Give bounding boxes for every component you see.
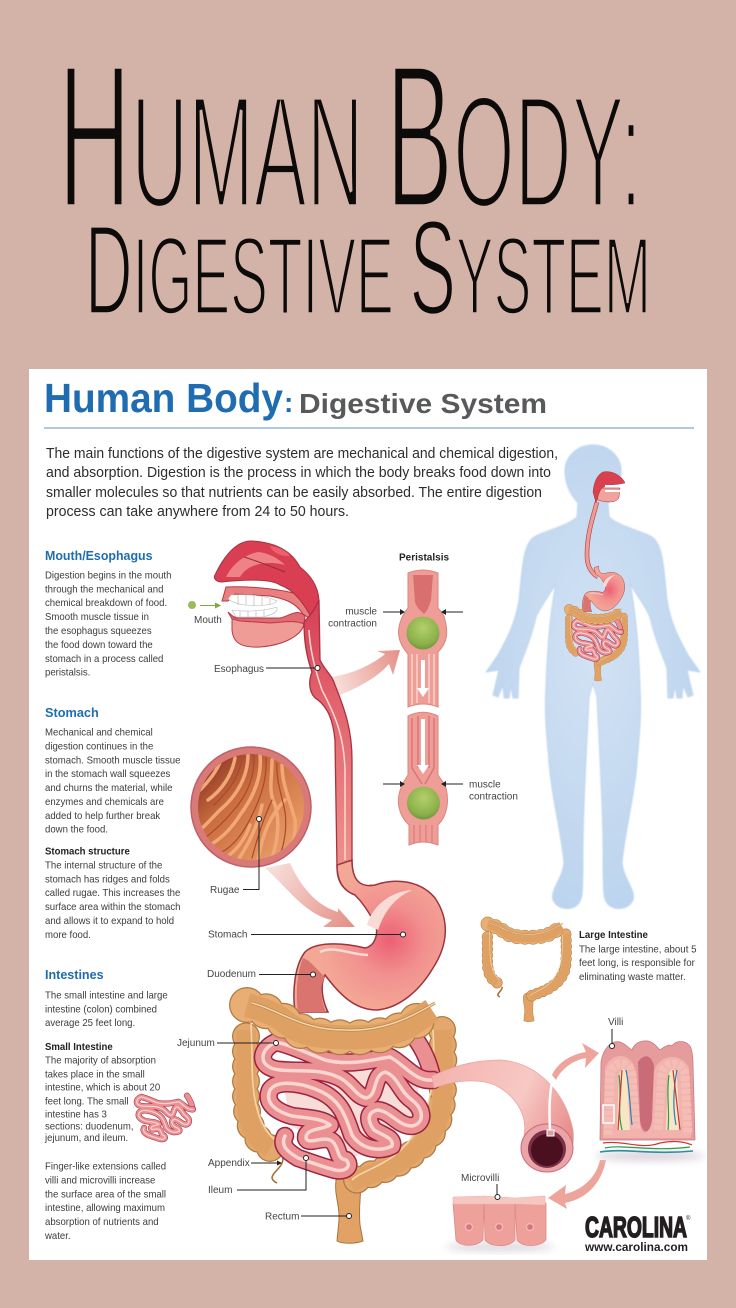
label: esophagus: Esophagus xyxy=(214,664,264,675)
text: intestines: intestine, allowing maximum xyxy=(45,1203,165,1214)
text: mouth/esophagus xyxy=(45,548,174,679)
text: intestines: intestine has 3 xyxy=(45,1109,107,1121)
logo: carolina: CAROLINA xyxy=(585,1212,687,1244)
label: villi xyxy=(608,1017,623,1048)
text: intestines: jejunum, and ileum. xyxy=(44,1133,128,1144)
tube from small intestine xyxy=(432,1060,573,1166)
rugae detail circle xyxy=(191,747,311,867)
label: mouth: Mouth xyxy=(194,615,222,626)
peristalsis: upper section xyxy=(399,570,447,707)
label: jejunum xyxy=(177,1038,278,1049)
text: intestines: The small intestine and large xyxy=(45,990,168,1002)
text: stomach: stomach has ridges and folds xyxy=(45,874,170,886)
text: mouth/esophagus: Mouth/Esophagus xyxy=(45,548,153,563)
label: peristalsis: Peristalsis xyxy=(399,552,449,564)
text: stomach: Mechanical and chemical xyxy=(45,727,153,739)
esophagus xyxy=(304,600,372,895)
intro text: smaller molecules so that nutrients can be easily absorbed. The entire digestion xyxy=(46,485,542,501)
text: stomach: stomach. Smooth muscle tissue xyxy=(45,755,181,767)
label: duodenum xyxy=(207,969,316,980)
labels and leader lines xyxy=(177,552,623,1222)
text: intestines: average 25 feet long. xyxy=(45,1018,135,1029)
text: stomach: Stomach structure xyxy=(45,846,130,858)
text: mouth/esophagus: Digestion begins in the mouth xyxy=(45,570,171,582)
intro text: process can take anywhere from 24 to 50 hours. xyxy=(46,504,349,520)
ascending and descending colon xyxy=(246,1015,443,1243)
label: esophagus xyxy=(214,664,320,675)
label: ileum: Ileum xyxy=(208,1185,232,1196)
text: mouth/esophagus: stomach in a process called xyxy=(45,654,163,665)
text: stomach: added to help further break xyxy=(45,811,160,822)
transverse colon xyxy=(247,1003,435,1037)
text: intestines: takes place in the small xyxy=(45,1069,145,1081)
arrow: villi to microvilli xyxy=(548,1160,606,1209)
intro text xyxy=(46,446,558,520)
large intestine icon xyxy=(487,923,566,1022)
icon: small intestine xyxy=(137,1096,193,1139)
text: stomach xyxy=(45,705,183,941)
label: rugae: Rugae xyxy=(210,885,240,896)
text: intestines: water. xyxy=(44,1231,71,1242)
label: stomach xyxy=(208,930,406,940)
text: mouth/esophagus: peristalsis. xyxy=(45,667,90,679)
text: intestines: intestine (colon) combined xyxy=(45,1004,157,1016)
peristalsis: lower section xyxy=(398,712,447,845)
text: stomach: surface area within the stomach xyxy=(45,902,180,913)
villi xyxy=(595,1041,705,1161)
label: ileum xyxy=(208,1156,308,1196)
body figure xyxy=(486,445,700,908)
text: stomach: down the food. xyxy=(45,824,108,836)
large intestine text: Large Intestine xyxy=(579,930,648,941)
text: stomach: and churns the material, while xyxy=(45,783,173,794)
intro text: and absorption. Digestion is the process in which the body breaks food down into xyxy=(46,465,551,481)
stomach and duodenum xyxy=(294,860,445,1012)
label: mouth xyxy=(188,601,222,626)
poster heading xyxy=(44,375,694,428)
text: intestines: feet long. The small xyxy=(45,1096,129,1108)
appendix xyxy=(272,1158,283,1183)
large intestine text: The large intestine, about 5 xyxy=(579,944,697,956)
text: stomach: digestion continues in the xyxy=(45,741,154,753)
text: mouth/esophagus: chemical breakdown of food. xyxy=(45,598,167,609)
poster heading: Human Body xyxy=(44,375,283,421)
label: muscle contraction lower: muscle xyxy=(469,780,501,790)
text: stomach: Stomach xyxy=(45,705,99,720)
arrow: tube to villi xyxy=(552,1043,599,1080)
text: intestines: absorption of nutrients and xyxy=(45,1217,159,1228)
poster heading: Digestive System xyxy=(299,388,547,419)
text: intestines: Intestines xyxy=(45,967,104,982)
text: intestines: the surface area of the small xyxy=(45,1189,166,1201)
text: intestines: villi and microvilli increase xyxy=(45,1175,156,1187)
text: stomach: The internal structure of the xyxy=(45,860,163,872)
label: microvilli: Microvilli xyxy=(461,1173,499,1184)
large intestine text xyxy=(579,930,699,983)
logo: carolina: www.carolina.com xyxy=(584,1242,688,1254)
text: mouth/esophagus: Smooth muscle tissue in xyxy=(45,612,149,623)
label: rectum xyxy=(265,1212,352,1222)
text: intestines: Small Intestine xyxy=(45,1042,113,1053)
text: intestines: sections: duodenum, xyxy=(45,1121,134,1133)
label: muscle contraction upper xyxy=(328,606,463,630)
text: stomach: and allows it to expand to hold xyxy=(45,916,174,927)
large intestine text: eliminating waste matter. xyxy=(579,972,686,983)
logo: carolina xyxy=(584,1212,691,1254)
illustration: digestive tract xyxy=(214,541,573,1243)
label: stomach: Stomach xyxy=(208,930,247,940)
label: duodenum: Duodenum xyxy=(207,969,256,980)
label: villi: Villi xyxy=(608,1017,623,1028)
title xyxy=(58,22,651,343)
text: intestines: intestine, which is about 20 xyxy=(45,1082,161,1094)
label: rugae xyxy=(210,816,262,896)
label: muscle contraction lower xyxy=(383,780,518,802)
peristalsis diagram xyxy=(398,570,447,845)
label: jejunum: Jejunum xyxy=(177,1038,215,1049)
icon: mini digestive system xyxy=(569,472,625,681)
text: mouth/esophagus: through the mechanical and xyxy=(45,584,163,596)
label: muscle contraction lower: contraction xyxy=(469,792,518,802)
microvilli cells xyxy=(445,1196,555,1251)
arrow: rugae to stomach xyxy=(265,863,355,927)
text: stomach: in the stomach wall squeezes xyxy=(45,769,170,780)
poster heading: : xyxy=(284,387,293,418)
logo: carolina: ® xyxy=(686,1215,691,1222)
text: stomach: enzymes and chemicals are xyxy=(45,797,164,808)
text: stomach: called rugae. This increases the xyxy=(45,888,181,899)
arrow: esophagus to peristalsis xyxy=(330,650,400,695)
label: muscle contraction upper: muscle xyxy=(345,606,377,618)
text: intestines: The majority of absorption xyxy=(45,1055,156,1067)
large intestine text: feet long, is responsible for xyxy=(579,958,696,969)
oral cavity xyxy=(214,541,319,647)
small intestine xyxy=(263,1038,433,1170)
tube opening xyxy=(521,1124,573,1172)
text: mouth/esophagus: the esophagus squeezes xyxy=(45,626,152,637)
panel: white poster xyxy=(29,369,707,1260)
text: intestines xyxy=(44,967,170,1242)
label: muscle contraction upper: contraction xyxy=(328,618,377,630)
intro text: The main functions of the digestive system are mechanical and chemical digestion, xyxy=(46,446,558,462)
text: stomach: more food. xyxy=(45,930,91,941)
text: mouth/esophagus: the food down toward the xyxy=(45,640,153,651)
text: intestines: Finger-like extensions called xyxy=(45,1161,166,1173)
label: rectum: Rectum xyxy=(265,1212,299,1222)
label: microvilli xyxy=(461,1173,500,1200)
label: appendix xyxy=(208,1158,282,1169)
label: appendix: Appendix xyxy=(208,1158,250,1169)
